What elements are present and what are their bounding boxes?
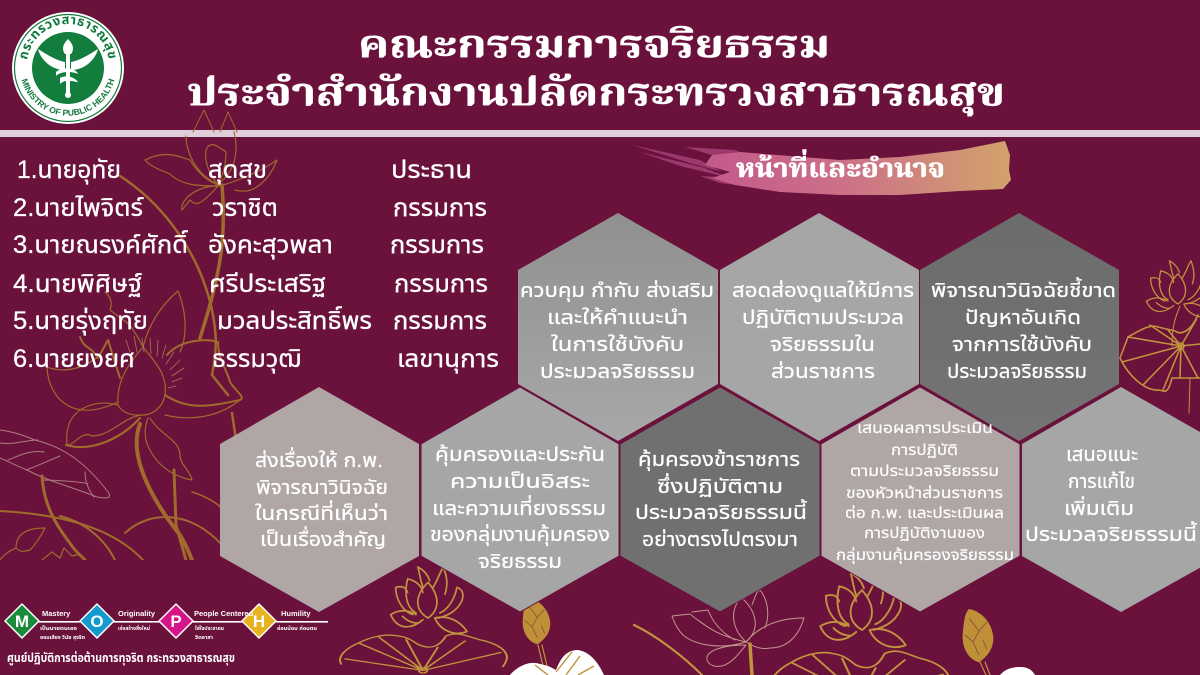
title line 1: คณะกรรมการจริยธรรม bbox=[358, 24, 830, 66]
committee member list: กรรมการ bbox=[390, 231, 484, 259]
hexagon: top 1 bbox=[518, 213, 718, 441]
title bbox=[187, 24, 1005, 117]
diamond P: P bbox=[170, 612, 182, 631]
brush heading: duties and powers bbox=[632, 141, 1011, 195]
white leaf 2 bbox=[1000, 667, 1035, 675]
diamond O bbox=[80, 604, 114, 638]
title line 2: ประจำสำนักงานปลัดกระทรวงสาธารณสุข bbox=[187, 72, 1005, 117]
committee member list: 1.นายอุทัย bbox=[17, 156, 121, 185]
hexagon: bottom 5 bbox=[1022, 387, 1200, 612]
value labels bbox=[40, 609, 317, 641]
white leaf 1 bbox=[510, 650, 604, 675]
diamond P bbox=[159, 604, 193, 638]
hexagon: bottom 4: กลุ่มงานคุ้มครองจริยธรรม bbox=[836, 546, 1014, 564]
value labels: ใส่ใจประชาชน bbox=[195, 624, 224, 632]
hexagon: top 2: สอดส่องดูแลให้มีการ bbox=[732, 279, 914, 303]
hexagon: bottom 4: ของหัวหน้าส่วนราชการ bbox=[846, 484, 1003, 502]
hexagon: top 3: ปัญหาอันเกิด bbox=[965, 307, 1081, 329]
hexagon: bottom 1: ในกรณีที่เห็นว่า bbox=[255, 500, 388, 525]
hexagon: top 3: ประมวลจริยธรรม bbox=[947, 361, 1087, 383]
committee member list: กรรมการ bbox=[393, 307, 487, 335]
value labels: เร่งสร้างสิ่งใหม่ bbox=[118, 624, 150, 632]
hexagon: top 1: ควบคุม กำกับ ส่งเสริม bbox=[520, 279, 714, 302]
hexagon: bottom 2: ความเป็นอิสระ bbox=[450, 471, 590, 493]
lotus line art: right background bbox=[1120, 261, 1200, 413]
value labels: Originality bbox=[118, 609, 156, 618]
hexagon: bottom 2: และความเที่ยงธรรม bbox=[432, 495, 606, 520]
MOPH values legend bbox=[5, 604, 328, 641]
committee member list: ศรีประเสริฐ bbox=[209, 270, 326, 298]
value labels: จิตอาสา bbox=[195, 635, 213, 641]
value labels: ยอมเสียง วินัย สุจริต bbox=[40, 634, 85, 641]
header divider band bbox=[0, 130, 1200, 137]
hexagon: top 2 bbox=[720, 213, 919, 441]
hexagon: top 3 bbox=[920, 213, 1119, 441]
brush streaks bbox=[632, 145, 760, 188]
committee member list: เลขานุการ bbox=[397, 345, 499, 374]
footer organisation name: ศูนย์ปฏิบัติการต่อต้านการทุจริต กระทรวงสาธารณสุข bbox=[7, 651, 235, 666]
hexagon: top 3: จากการใช้บังคับ bbox=[952, 333, 1092, 356]
hexagon: top 1: ในการใช้บังคับ bbox=[551, 333, 684, 356]
logo english text: MINISTRY OF PUBLIC HEALTH bbox=[22, 78, 114, 116]
hexagon: bottom 3: อย่างตรงไปตรงมา bbox=[642, 528, 798, 551]
hexagon: bottom 3 bbox=[620, 387, 820, 612]
hexagon: top 2: ส่วนราชการ bbox=[771, 360, 875, 383]
pale lotus bbox=[672, 590, 804, 666]
hexagon: bottom 5: เสนอแนะ bbox=[1066, 444, 1138, 466]
committee member list: มวลประสิทธิ์พร bbox=[217, 305, 372, 335]
hexagon: bottom 4: เสนอผลการประเมิน bbox=[857, 420, 993, 437]
hexagon: bottom 2: จริยธรรม bbox=[478, 551, 562, 573]
hexagon: top 3: พิจารณาวินิจฉัยชี้ขาด bbox=[931, 277, 1116, 302]
hexagon: bottom 3: ซึ่งปฏิบัติตาม bbox=[657, 473, 783, 498]
logo thai text: กระทรวงสาธารณสุข bbox=[20, 16, 116, 60]
hexagon: bottom 1: เป็นเรื่องสำคัญ bbox=[260, 526, 386, 551]
committee member list: 5.นายรุ่งฤทัย bbox=[13, 307, 148, 336]
value labels: เป็นนายตนเอง bbox=[40, 625, 77, 632]
hexagon: bottom 4: ตามประมวลจริยธรรม bbox=[850, 463, 999, 480]
value labels: Humility bbox=[281, 609, 311, 618]
committee member list: 6.นายยงยศ bbox=[13, 345, 135, 373]
brush stroke bbox=[705, 141, 1011, 195]
hexagon: bottom 4: ต่อ ก.พ. และประเมินผล bbox=[845, 504, 1004, 522]
logo emblem bbox=[38, 39, 98, 98]
lotus group 1 bbox=[391, 567, 467, 633]
lotus line art: bottom bbox=[340, 567, 1035, 675]
committee member list: 2.นายไพจิตร์ bbox=[13, 194, 144, 222]
hexagon: top 2: จริยธรรมใน bbox=[770, 334, 875, 356]
hexagon: bottom 5: เพิ่มเติม bbox=[1064, 496, 1134, 520]
bud 1 bbox=[523, 598, 550, 644]
value labels: Mastery bbox=[42, 609, 71, 618]
committee member list: กรรมการ bbox=[393, 194, 487, 222]
hexagon: bottom 1: พิจารณาวินิจฉัย bbox=[256, 477, 388, 499]
committee member list: วราชิต bbox=[212, 194, 278, 222]
committee member list: ประธาน bbox=[391, 156, 472, 184]
value labels: อ่อนน้อม ถ่อมตน bbox=[277, 624, 317, 632]
diamond H: H bbox=[253, 612, 265, 631]
committee member list: ธรรมวุฒิ bbox=[212, 345, 301, 374]
diamond O: O bbox=[90, 612, 104, 631]
hexagon: bottom 2: คุ้มครองและประกัน bbox=[435, 443, 605, 466]
hexagon: bottom 4 bbox=[821, 387, 1020, 612]
heading text: หน้าที่และอำนาจ bbox=[736, 149, 945, 183]
lotus line art: left background bbox=[0, 110, 277, 560]
committee member list: สุดสุข bbox=[208, 156, 267, 185]
value labels: People Centered bbox=[194, 609, 254, 618]
hexagon: bottom 1: ส่งเรื่องให้ ก.พ. bbox=[255, 447, 383, 472]
bud 2 bbox=[963, 609, 993, 662]
hexagon: bottom 2 bbox=[421, 387, 619, 612]
diamond M bbox=[5, 604, 39, 638]
hexagon: top 1: และให้คำแนะนำ bbox=[547, 306, 688, 329]
diamond M: M bbox=[15, 612, 29, 631]
committee member list bbox=[13, 156, 499, 374]
hexagon: bottom 3: ประมวลจริยธรรมนี้ bbox=[635, 499, 807, 524]
committee member list: กรรมการ bbox=[394, 270, 488, 298]
hexagon: top 1: ประมวลจริยธรรม bbox=[540, 361, 695, 383]
hexagon: bottom 4: การปฏิบัติงานของ bbox=[864, 525, 985, 542]
hexagon: bottom 5: ประมวลจริยธรรมนี้ bbox=[1025, 521, 1197, 546]
logo disc bbox=[12, 12, 124, 124]
diamond H bbox=[242, 604, 276, 638]
ministry logo bbox=[12, 12, 124, 124]
committee member list: 4.นายพิศิษฐ์ bbox=[13, 270, 142, 298]
hexagon: bottom 5: การแก้ไข bbox=[1068, 470, 1135, 493]
lotus group 2 bbox=[820, 573, 906, 647]
committee member list: อังคะสุวพลา bbox=[208, 231, 333, 260]
hexagon: bottom 4: การปฏิบัติ bbox=[891, 442, 958, 459]
hexagon: top 2: ปฏิบัติตามประมวล bbox=[742, 307, 904, 329]
hexagon: bottom 2: ของกลุ่มงานคุ้มครอง bbox=[430, 523, 610, 546]
committee member list: 3.นายณรงค์ศักดิ์ bbox=[13, 229, 188, 259]
hexagon: bottom 1 bbox=[220, 387, 419, 612]
hexagon: bottom 3: คุ้มครองข้าราชการ bbox=[638, 448, 800, 471]
